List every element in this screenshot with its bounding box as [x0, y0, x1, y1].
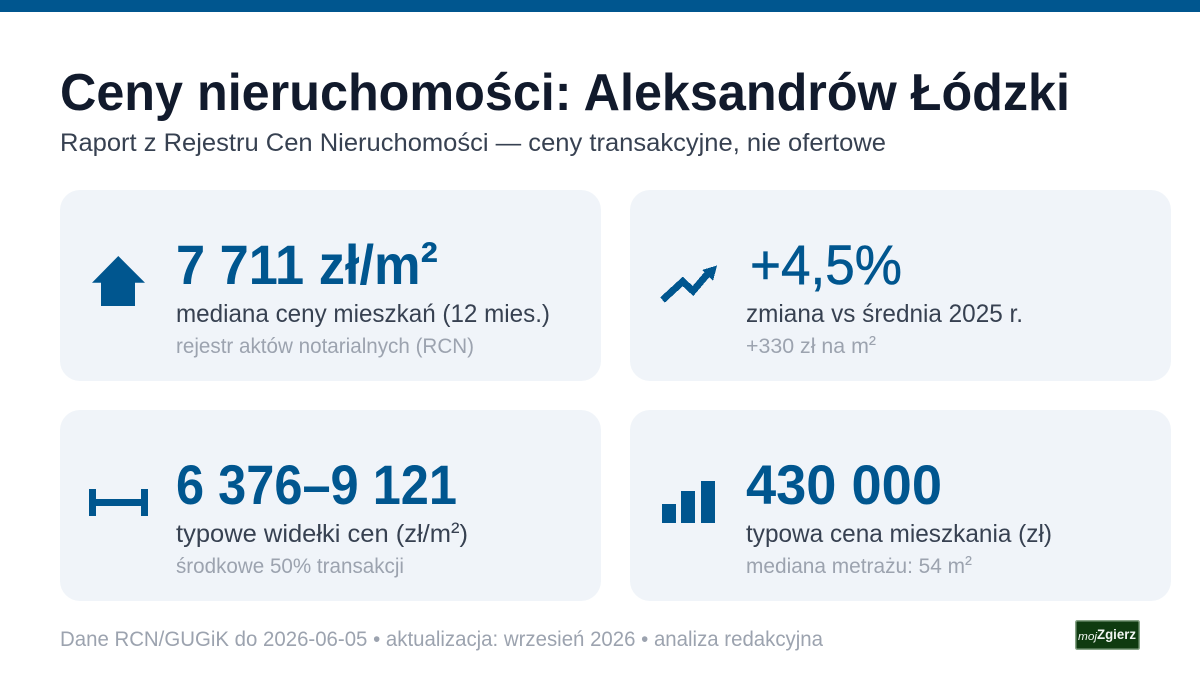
icon: bar chart — [662, 481, 715, 523]
label: typical price: typowa cena mieszkania (zł) — [746, 520, 1052, 548]
value: typical price: 430 000 — [746, 453, 942, 516]
logo: moj — [1078, 631, 1098, 643]
icon: range bracket — [89, 489, 148, 516]
note: median price: rejestr aktów notarialnych (RCN) — [176, 335, 474, 358]
value: price range: 6 376–9 121 — [176, 453, 457, 516]
note: typical price: mediana metrażu: 54 m — [746, 555, 967, 578]
panel: typical price — [630, 410, 1171, 601]
value: change: +4,5% — [750, 233, 902, 296]
label: change: zmiana vs średnia 2025 r. — [746, 300, 1023, 328]
icon: trend arrow — [662, 266, 717, 300]
note: change: +330 zł na m — [746, 335, 867, 358]
title: Ceny nieruchomości: Aleksandrów Łódzki — [60, 64, 1070, 122]
note: change: ² — [869, 333, 876, 356]
footer source note: Dane RCN/GUGiK do 2026-06-05 • aktualizacja: wrzesień 2026 • analiza redakcyjna — [60, 628, 823, 651]
label: price range: ) — [460, 520, 468, 548]
panel: price range — [60, 410, 601, 601]
logo — [1076, 621, 1139, 649]
label: price range: ² — [451, 518, 460, 546]
label: price range: typowe widełki cen (zł/m — [176, 520, 446, 548]
icon: house — [92, 256, 145, 306]
label: median price: mediana ceny mieszkań (12 mies.) — [176, 300, 550, 328]
panel: change — [630, 190, 1171, 381]
value: median price: 7 711 zł/m — [176, 233, 438, 296]
top bar — [0, 0, 1200, 12]
note: typical price: ² — [965, 553, 972, 576]
value: median price: ² — [421, 230, 438, 293]
logo: Zgierz — [1097, 626, 1136, 642]
subtitle: Raport z Rejestru Cen Nieruchomości — ceny transakcyjne, nie ofertowe — [60, 129, 886, 157]
note: price range: środkowe 50% transakcji — [176, 555, 404, 578]
panel: median price — [60, 190, 601, 381]
